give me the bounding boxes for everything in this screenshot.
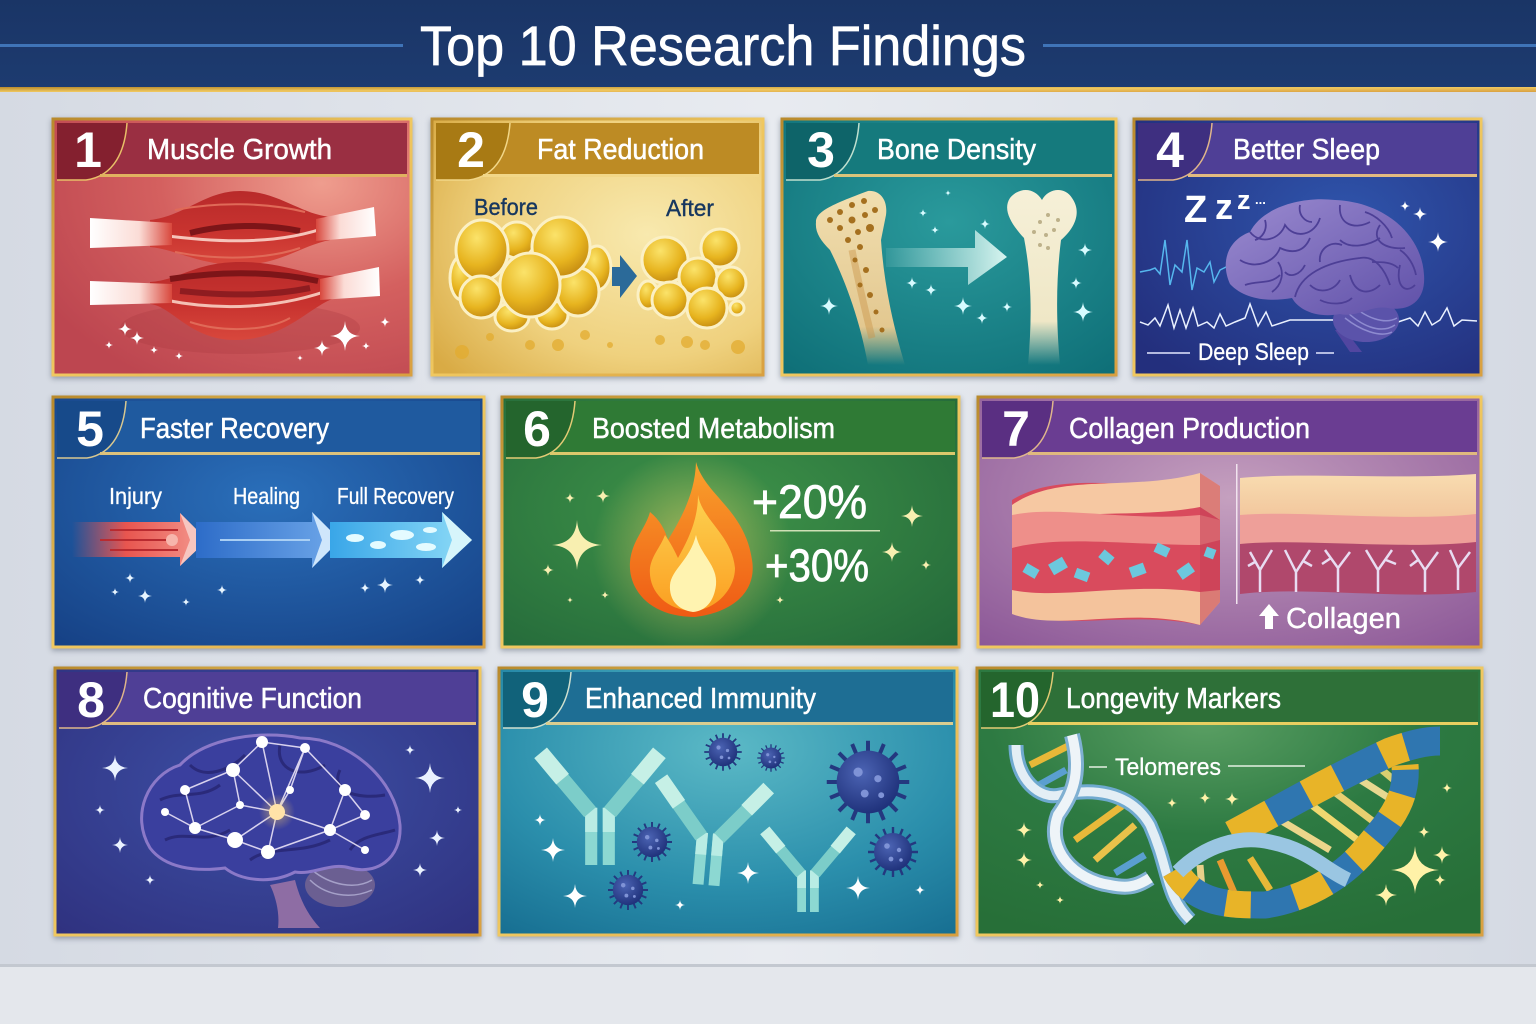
skin block before xyxy=(1012,473,1220,625)
panel 1: Muscle Growth xyxy=(53,119,411,375)
number: 5 xyxy=(76,401,104,457)
dna helix xyxy=(1016,735,1440,920)
sparkles xyxy=(105,317,390,361)
divider line xyxy=(770,530,880,532)
number: 9 xyxy=(521,672,549,728)
sparkles xyxy=(95,745,462,885)
panel 10: Longevity Markers xyxy=(977,668,1482,935)
sparkles xyxy=(534,814,925,910)
skin section after xyxy=(1240,474,1476,595)
heading: Longevity Markers xyxy=(1066,683,1281,715)
number: 8 xyxy=(77,672,105,728)
number: 2 xyxy=(457,122,485,178)
bottom floor strip xyxy=(0,964,1536,1024)
label: injury: Injury xyxy=(109,483,162,509)
stat: +20%: +20% xyxy=(752,475,867,528)
label: deep sleep: Deep Sleep xyxy=(1198,339,1309,366)
panel 8: Cognitive Function xyxy=(55,668,480,935)
sparkles xyxy=(820,190,1093,324)
label: before: Before xyxy=(474,194,538,220)
number: 3 xyxy=(807,122,835,178)
snore text: ... xyxy=(1255,192,1266,207)
arrow: healing xyxy=(196,512,340,568)
heading: Bone Density xyxy=(877,134,1036,166)
label: collagen up: Collagen xyxy=(1286,603,1401,635)
heading: Faster Recovery xyxy=(140,413,329,445)
panel 9: Enhanced Immunity xyxy=(499,668,957,935)
heading: Muscle Growth xyxy=(147,134,332,166)
panel 4: Better Sleep xyxy=(1134,119,1481,375)
number: 10 xyxy=(990,672,1040,728)
arrow xyxy=(612,255,637,298)
title banner xyxy=(0,0,1536,92)
heading: Enhanced Immunity xyxy=(585,683,816,715)
arrow: full recovery xyxy=(330,512,472,568)
heading: Fat Reduction xyxy=(537,134,704,166)
panel 6: Boosted Metabolism xyxy=(502,397,959,650)
snore text xyxy=(1184,185,1266,231)
flame xyxy=(592,450,792,650)
heading: Better Sleep xyxy=(1233,134,1380,166)
label: after: After xyxy=(666,195,714,221)
label: healing: Healing xyxy=(233,483,300,509)
label: telomeres: Telomeres xyxy=(1115,754,1221,781)
bone after xyxy=(1007,190,1077,365)
sparkles xyxy=(111,573,425,606)
number: 6 xyxy=(523,401,551,457)
label: full recovery: Full Recovery xyxy=(337,483,454,509)
sparkles xyxy=(1016,783,1452,906)
bone before xyxy=(816,191,905,365)
panel 5: Faster Recovery xyxy=(53,397,484,647)
brain waves xyxy=(1140,240,1477,328)
divider xyxy=(1236,464,1238,604)
sparkles xyxy=(1400,201,1448,252)
panel 7: Collagen Production xyxy=(978,397,1481,647)
number: 7 xyxy=(1002,401,1030,457)
arrow: injury xyxy=(72,513,207,566)
number: 1 xyxy=(74,122,102,178)
antibodies xyxy=(541,753,851,912)
heading: Collagen Production xyxy=(1069,413,1310,445)
fat cells before xyxy=(450,217,611,331)
panel 3: Bone Density xyxy=(782,119,1116,375)
heading: Cognitive Function xyxy=(143,683,362,715)
panel 2: Fat Reduction xyxy=(432,119,763,375)
arrow xyxy=(886,230,1007,285)
viruses xyxy=(608,733,918,910)
snore text: z xyxy=(1237,185,1250,215)
fat cells after xyxy=(638,229,746,328)
droplets xyxy=(455,330,745,359)
sparkles xyxy=(542,489,931,604)
brain network xyxy=(142,735,400,928)
stat: +30%: +30% xyxy=(765,540,869,591)
brain xyxy=(1226,199,1424,352)
snore text: Z xyxy=(1184,189,1207,231)
title: Top 10 Research Findings xyxy=(420,14,1026,77)
snore text: z xyxy=(1215,186,1233,227)
illustration: muscles xyxy=(90,191,380,354)
heading: Boosted Metabolism xyxy=(592,413,835,445)
number: 4 xyxy=(1156,122,1184,178)
